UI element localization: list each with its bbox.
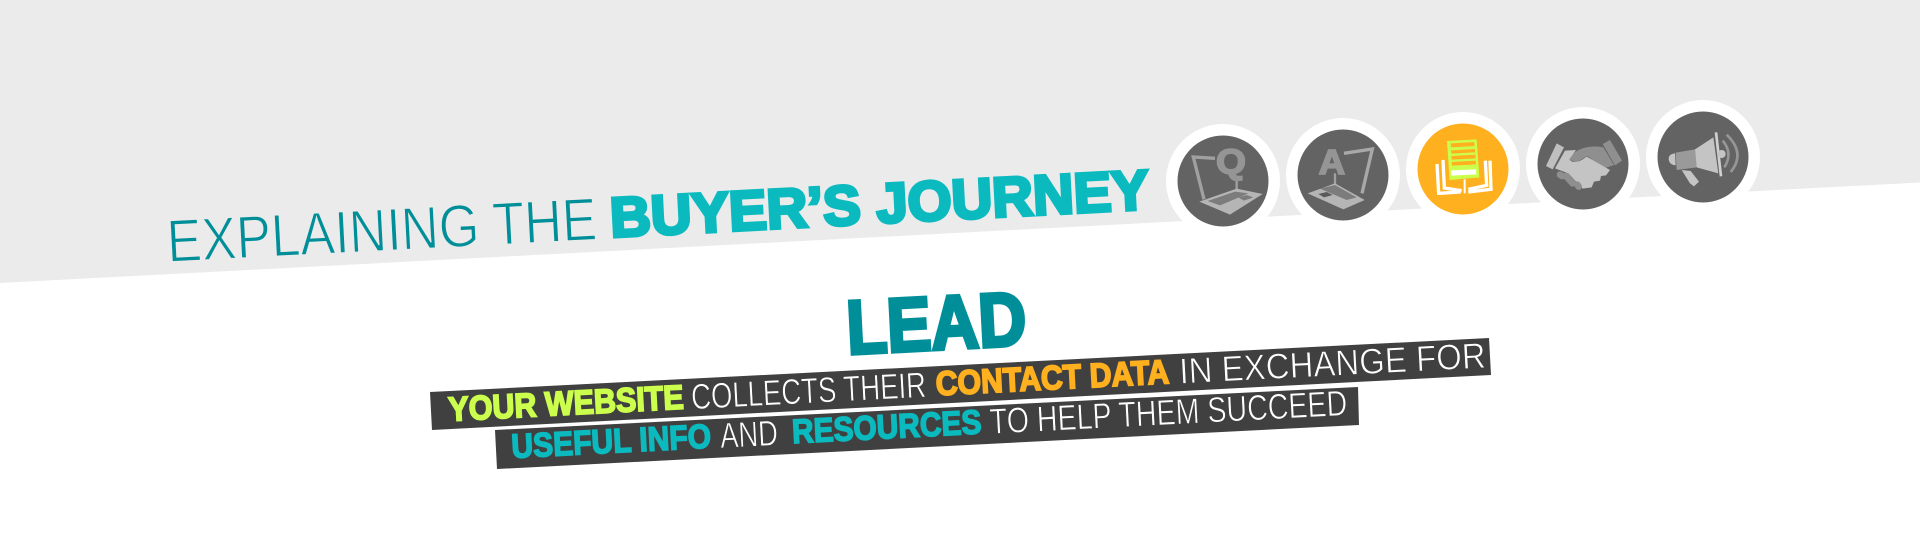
icon: question laptop	[1166, 124, 1280, 238]
text: contact data: CONTACT DATA	[935, 353, 1170, 403]
heading: lead: LEAD	[844, 277, 1028, 371]
text: to help them succeed: TO HELP THEM SUCCEED	[989, 382, 1348, 442]
title: buyer's journey: BUYER’S JOURNEY	[608, 158, 1150, 249]
text: collects their: COLLECTS THEIR	[690, 364, 927, 417]
title	[165, 158, 1150, 275]
icon: handshake	[1526, 107, 1640, 221]
text: useful info: USEFUL INFO	[510, 418, 712, 466]
text: and: AND	[719, 412, 779, 456]
icon: book with lead form	[1406, 112, 1520, 226]
icon: answer laptop: A	[1319, 143, 1345, 182]
banner: second line	[495, 382, 1359, 469]
icon: megaphone	[1646, 100, 1760, 214]
text: your website: YOUR WEBSITE	[447, 379, 685, 429]
title: explaining the: EXPLAINING THE	[165, 186, 598, 275]
panel: grey slanted header background	[0, 0, 1920, 283]
banner: first line	[430, 335, 1491, 430]
icon: answer laptop	[1286, 118, 1400, 232]
icon: question laptop: Q	[1216, 142, 1246, 181]
text: resources: RESOURCES	[791, 403, 982, 451]
text: in exchange for: IN EXCHANGE FOR	[1178, 335, 1487, 392]
